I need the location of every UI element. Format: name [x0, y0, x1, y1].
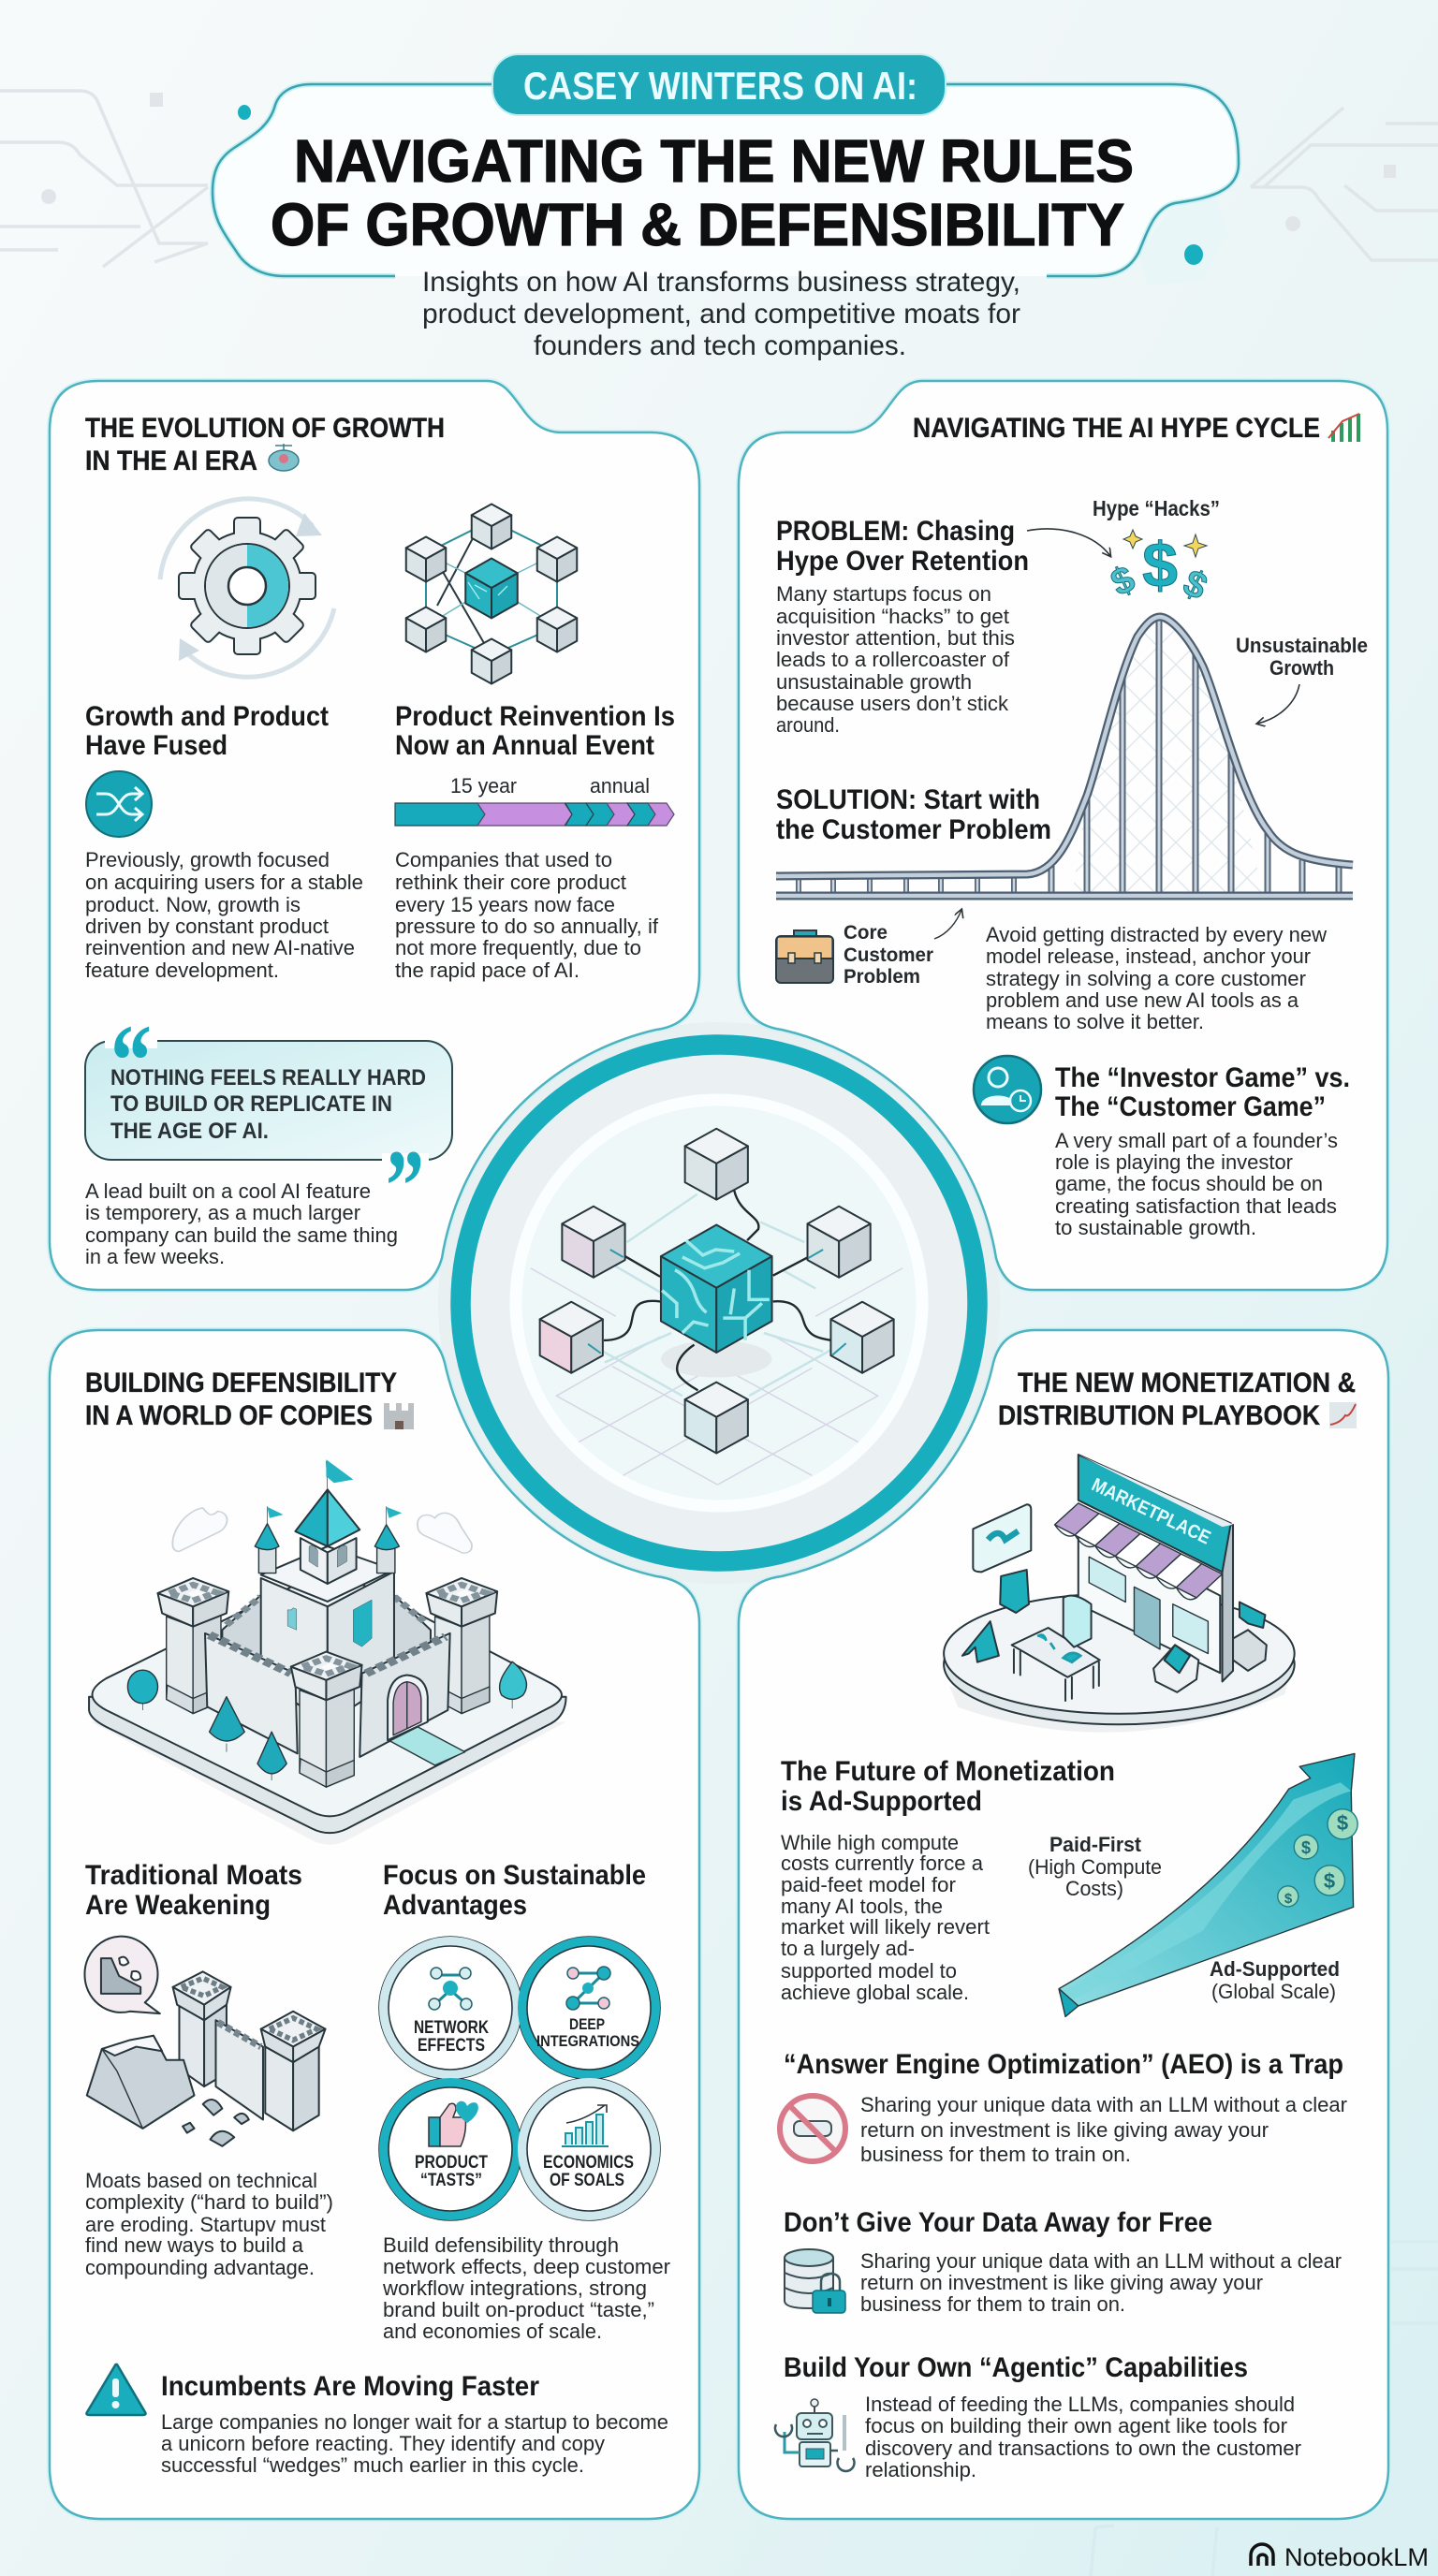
sign A-frame: [962, 1621, 999, 1662]
text: investor game vs customer game: role is playing the investor: [1055, 1150, 1293, 1174]
table: [1012, 1628, 1100, 1701]
header pill: Casey Winters on AI: [492, 54, 946, 115]
title: [271, 127, 1134, 258]
chart: paid-first to ad-supported arrow: Costs): [1065, 1877, 1123, 1900]
section: answer engine optimization: return on investment is like giving away your: [860, 2118, 1269, 2142]
section: answer engine optimization: [780, 2049, 1347, 2166]
ring: network effects: NETWORK: [414, 2018, 489, 2038]
text: growth and product have fused: Previously, growth focused: [85, 848, 330, 871]
text: lead built on a cool AI feature: [85, 1179, 398, 1268]
text: problem chasing hype: acquisition “hacks” to get: [776, 605, 1009, 628]
section: build agentic capabilities: Instead of feeding the LLMs, companies should: [865, 2393, 1295, 2416]
text: future of monetization: paid-feet model for: [781, 1873, 956, 1896]
chart: paid-first to ad-supported arrow: [1028, 1753, 1357, 2016]
illustration: isometric castle: [89, 1459, 566, 1845]
text: avoid getting distracted: model release, instead, anchor your: [986, 944, 1311, 968]
text: product reinvention annual event: [395, 701, 675, 982]
label: core customer problem with briefcase: Problem: [844, 966, 920, 988]
label: core customer problem with briefcase: [776, 910, 961, 988]
text: investor game vs customer game: The “Investor Game” vs.: [1055, 1062, 1350, 1093]
text: solution heading: [776, 784, 1051, 845]
text: investor game vs customer game: The “Customer Game”: [1055, 1091, 1326, 1122]
text: future of monetization: market will likely revert: [781, 1915, 990, 1939]
trees: [127, 1661, 526, 1780]
text: problem chasing hype: leads to a rollercoaster of: [776, 648, 1010, 671]
gate: [388, 1675, 465, 1765]
icon: warning triangle: [86, 2364, 146, 2415]
chart: paid-first to ad-supported arrow: $: [1324, 1869, 1335, 1893]
label: unsustainable growth: Unsustainable: [1236, 634, 1368, 657]
text: future of monetization: is Ad-Supported: [781, 1786, 982, 1817]
chart: paid-first to ad-supported arrow: (High Compute: [1028, 1855, 1162, 1879]
text: future of monetization: to a lurgely ad-: [781, 1937, 915, 1960]
header pill: Casey Winters on AI: CASEY WINTERS ON AI:: [523, 64, 917, 108]
text: growth and product have fused: feature development.: [85, 959, 279, 982]
section: build agentic capabilities: Build Your Own “Agentic” Capabilities: [784, 2352, 1248, 2383]
text: growth and product have fused: driven by constant product: [85, 915, 329, 938]
section: build agentic capabilities: [775, 2352, 1301, 2481]
ring: network effects: [414, 1968, 489, 2056]
callout: nothing feels really hard: “: [110, 1003, 152, 1118]
chart: 15 year vs annual timeline: 15 year: [450, 774, 517, 798]
ring: economies of scale: ECONOMICS: [543, 2153, 634, 2173]
footer: NotebookLM logo: NotebookLM: [1284, 2543, 1429, 2571]
panel: monetization and distribution: [739, 1330, 1388, 2519]
text: lead built on a cool AI feature: company can build the same thing: [85, 1223, 398, 1247]
text: future of monetization: The Future of Monetization: [781, 1756, 1115, 1787]
ad billboard: [973, 1504, 1031, 1613]
icon: briefcase: [776, 930, 833, 983]
small turrets: [255, 1506, 402, 1573]
chart: paid-first to ad-supported arrow: $: [1301, 1838, 1311, 1857]
label: hype hacks with dollars: $: [1142, 530, 1178, 601]
diagram: four sustainable advantage rings: [379, 1937, 660, 2220]
text: future of monetization: achieve global scale.: [781, 1981, 969, 2004]
callout: nothing feels really hard: [85, 1003, 452, 1243]
heading: evolution of growth: IN THE AI ERA: [85, 446, 257, 476]
text: traditional moats: Are Weakening: [85, 1890, 271, 1921]
clouds: [172, 1508, 472, 1553]
text: problem chasing hype: investor attention, but this: [776, 626, 1015, 650]
text: lead built on a cool AI feature: in a few weeks.: [85, 1245, 225, 1268]
label: hype hacks with dollars: $: [1105, 558, 1141, 605]
central hub ring: [461, 1045, 977, 1561]
text: solution heading: SOLUTION: Start with: [776, 784, 1040, 815]
text: focus on sustainable advantages: Advantages: [383, 1890, 527, 1921]
text: traditional moats: find new ways to build a: [85, 2233, 304, 2257]
label: hype hacks with dollars: Hype “Hacks”: [1093, 496, 1220, 520]
text: avoid getting distracted: Avoid getting distracted by every new: [986, 923, 1327, 946]
ring: product tastes: PRODUCT: [415, 2153, 488, 2173]
phone kiosk: [1064, 1596, 1092, 1647]
text: problem chasing hype: around.: [776, 713, 840, 737]
text: future of monetization: supported model to: [781, 1959, 957, 1983]
ring: deep integrations: DEEP: [569, 2015, 605, 2033]
text: lead built on a cool AI feature: is temporery, as a much larger: [85, 1201, 360, 1224]
text: future of monetization: [781, 1756, 1115, 2004]
text: investor game vs customer game: to sustainable growth.: [1055, 1216, 1256, 1239]
chart: rollercoaster hype curve: [776, 617, 1353, 896]
heading: defensibility: [85, 1368, 414, 1431]
text: problem chasing hype: [776, 516, 1029, 737]
callout: nothing feels really hard: THE AGE OF AI.: [110, 1119, 269, 1144]
text: future of monetization: While high compute: [781, 1831, 959, 1854]
text: product reinvention annual event: Product Reinvention Is: [395, 701, 675, 732]
text: focus on sustainable advantages: workflow integrations, strong: [382, 2276, 647, 2300]
text: avoid getting distracted: means to solve it better.: [986, 1010, 1204, 1033]
ring: product tastes: “TASTS”: [420, 2171, 482, 2190]
text: product reinvention annual event: not more frequently, due to: [395, 936, 641, 959]
text: incumbents are moving faster: Large companies no longer wait for a startup to become: [161, 2410, 668, 2434]
text: growth and product have fused: reinvention and new AI-native: [85, 936, 355, 959]
text: traditional moats: Traditional Moats: [85, 1860, 302, 1891]
callout: nothing feels really hard: NOTHING FEELS REALLY HARD: [110, 1065, 426, 1090]
ring: network effects: EFFECTS: [418, 2036, 485, 2056]
text: lead built on a cool AI feature: A lead built on a cool AI feature: [85, 1179, 371, 1203]
text: focus on sustainable advantages: [382, 1860, 670, 2343]
text: problem chasing hype: Many startups focus on: [776, 582, 991, 606]
label: hype hacks with dollars: [1027, 496, 1220, 608]
section: do not give your data away: Don’t Give Your Data Away for Free: [784, 2207, 1212, 2238]
section: build agentic capabilities: relationship.: [865, 2458, 976, 2481]
text: growth and product have fused: product. Now, growth is: [85, 893, 301, 916]
section: do not give your data away: Sharing your unique data with an LLM without a clear: [860, 2249, 1342, 2273]
text: investor game vs customer game: [1055, 1062, 1350, 1239]
text: problem chasing hype: because users don’t stick: [776, 692, 1009, 715]
title: NAVIGATING THE NEW RULES: [294, 127, 1134, 195]
heading: evolution of growth: [85, 413, 445, 476]
label: core customer problem with briefcase: Core: [844, 922, 888, 944]
ring: economies of scale: [543, 2105, 634, 2190]
panel: AI hype cycle: [739, 381, 1387, 1290]
text: future of monetization: many AI tools, the: [781, 1895, 943, 1918]
text: problem chasing hype: unsustainable growth: [776, 670, 972, 694]
icon: database with lock: [785, 2249, 845, 2313]
label: hype hacks with dollars: $: [1177, 562, 1213, 608]
subtitle: founders and tech companies.: [534, 330, 906, 361]
text: traditional moats: are eroding. Startupv must: [85, 2213, 326, 2236]
chart: paid-first to ad-supported arrow: Paid-First: [1049, 1833, 1142, 1856]
store: MARKETPLACE: [1088, 1474, 1213, 1549]
text: avoid getting distracted: [986, 923, 1327, 1033]
ring: deep integrations: [536, 1967, 639, 2050]
ring: deep integrations: INTEGRATIONS: [536, 2032, 639, 2050]
text: solution heading: the Customer Problem: [776, 814, 1051, 845]
illustration: marketplace storefront: [944, 1455, 1295, 1733]
section: do not give your data away: business for them to train on.: [860, 2292, 1125, 2316]
icon: prohibited data: [780, 2096, 845, 2161]
text: product reinvention annual event: pressure to do so annually, if: [395, 915, 659, 938]
chart: paid-first to ad-supported arrow: $: [1337, 1811, 1348, 1835]
text: traditional moats: [85, 1860, 333, 2279]
text: traditional moats: Moats based on technical: [85, 2169, 317, 2192]
text: growth and product have fused: on acquiring users for a stable: [85, 871, 363, 894]
header frame: [213, 84, 1239, 285]
text: focus on sustainable advantages: brand built on-product “taste,”: [383, 2298, 654, 2321]
label: core customer problem with briefcase: Customer: [844, 944, 933, 966]
text: product reinvention annual event: every 15 years now face: [395, 893, 615, 916]
text: traditional moats: compounding advantage.: [85, 2256, 315, 2279]
icon: product network of cubes: [406, 504, 577, 683]
text: avoid getting distracted: problem and use new AI tools as a: [986, 988, 1299, 1012]
heading: hype cycle: NAVIGATING THE AI HYPE CYCLE: [913, 413, 1320, 444]
section: do not give your data away: return on investment is like giving away your: [860, 2271, 1263, 2294]
subtitle: Insights on how AI transforms business strategy,: [422, 267, 1020, 298]
text: focus on sustainable advantages: Focus on Sustainable: [383, 1860, 646, 1891]
text: investor game vs customer game: game, the focus should be on: [1055, 1172, 1323, 1195]
text: investor game vs customer game: creating satisfaction that leads: [1055, 1194, 1337, 1218]
illustration: crumbling moat walls: [84, 1937, 326, 2146]
store: [1055, 1455, 1233, 1681]
icon: shuffle: [86, 771, 152, 837]
text: problem chasing hype: Hype Over Retention: [776, 546, 1029, 577]
icon: gear with cycle arrows: [160, 499, 334, 677]
heading: evolution of growth: THE EVOLUTION OF GROWTH: [85, 413, 445, 444]
text: focus on sustainable advantages: and economies of scale.: [383, 2320, 602, 2343]
text: avoid getting distracted: strategy in solving a core customer: [986, 967, 1306, 990]
label: unsustainable growth: [1236, 634, 1368, 724]
text: problem chasing hype: PROBLEM: Chasing: [776, 516, 1015, 547]
text: growth and product have fused: Growth and Product: [85, 701, 329, 732]
section: build agentic capabilities: focus on building their own agent like tools for: [865, 2414, 1287, 2437]
text: future of monetization: costs currently force a: [781, 1852, 984, 1875]
chart: paid-first to ad-supported arrow: Ad-Supported: [1210, 1957, 1340, 1981]
panel: building defensibility: [50, 1330, 699, 2519]
text: product reinvention annual event: Now an Annual Event: [395, 730, 654, 761]
chart: paid-first to ad-supported arrow: (Global Scale): [1211, 1980, 1336, 2003]
ring: economies of scale: OF SOALS: [550, 2171, 624, 2190]
heading: monetization: THE NEW MONETIZATION &: [1018, 1368, 1356, 1398]
text: product reinvention annual event: Companies that used to: [395, 848, 612, 871]
section: do not give your data away: [784, 2207, 1342, 2316]
text: growth and product have fused: [85, 701, 363, 982]
heading: defensibility: IN A WORLD OF COPIES: [85, 1400, 373, 1431]
chart: paid-first to ad-supported arrow: $: [1284, 1891, 1293, 1907]
heading: monetization: [998, 1368, 1357, 1431]
text: incumbents are moving faster: Incumbents Are Moving Faster: [161, 2371, 539, 2402]
illustration: central cube network: [531, 1129, 902, 1485]
text: incumbents are moving faster: a unicorn before reacting. They identify and copy: [161, 2432, 605, 2455]
subtitle: product development, and competitive moats for: [422, 299, 1020, 329]
text: incumbents are moving faster: successful “wedges” much earlier in this cycle.: [161, 2453, 584, 2477]
title: OF GROWTH & DEFENSIBILITY: [271, 191, 1124, 258]
heading: monetization: DISTRIBUTION PLAYBOOK: [998, 1400, 1320, 1431]
chart: 15 year vs annual timeline: annual: [590, 774, 650, 798]
section: build agentic capabilities: discovery and transactions to own the customer: [865, 2437, 1301, 2460]
icon: person with clock: [974, 1056, 1041, 1123]
callout: nothing feels really hard: ”: [386, 1129, 424, 1243]
section: answer engine optimization: “Answer Engine Optimization” (AEO) is a Trap: [784, 2049, 1343, 2080]
section: answer engine optimization: Sharing your unique data with an LLM without a clear: [860, 2093, 1347, 2116]
ring: product tastes: [415, 2101, 488, 2190]
callout: nothing feels really hard: TO BUILD OR REPLICATE IN: [110, 1091, 392, 1117]
chart: 15 year vs annual timeline: [395, 774, 674, 826]
text: product reinvention annual event: the rapid pace of AI.: [395, 959, 580, 982]
text: growth and product have fused: Have Fused: [85, 730, 227, 761]
panel: evolution of growth: [50, 381, 699, 1290]
register and box: [1153, 1602, 1267, 1692]
text: focus on sustainable advantages: Build defensibility through: [383, 2233, 619, 2257]
label: unsustainable growth: Growth: [1269, 656, 1334, 680]
text: focus on sustainable advantages: network effects, deep customer: [383, 2255, 670, 2278]
subtitle: [422, 267, 1020, 361]
text: incumbents are moving faster: [161, 2371, 668, 2477]
heading: defensibility: BUILDING DEFENSIBILITY: [85, 1368, 397, 1398]
text: traditional moats: complexity (“hard to build”): [85, 2190, 333, 2214]
section: answer engine optimization: business for them to train on.: [860, 2143, 1131, 2166]
icon: robot with tools: [775, 2399, 854, 2471]
text: investor game vs customer game: A very small part of a founder’s: [1055, 1129, 1338, 1152]
text: product reinvention annual event: rethink their core product: [395, 871, 626, 894]
